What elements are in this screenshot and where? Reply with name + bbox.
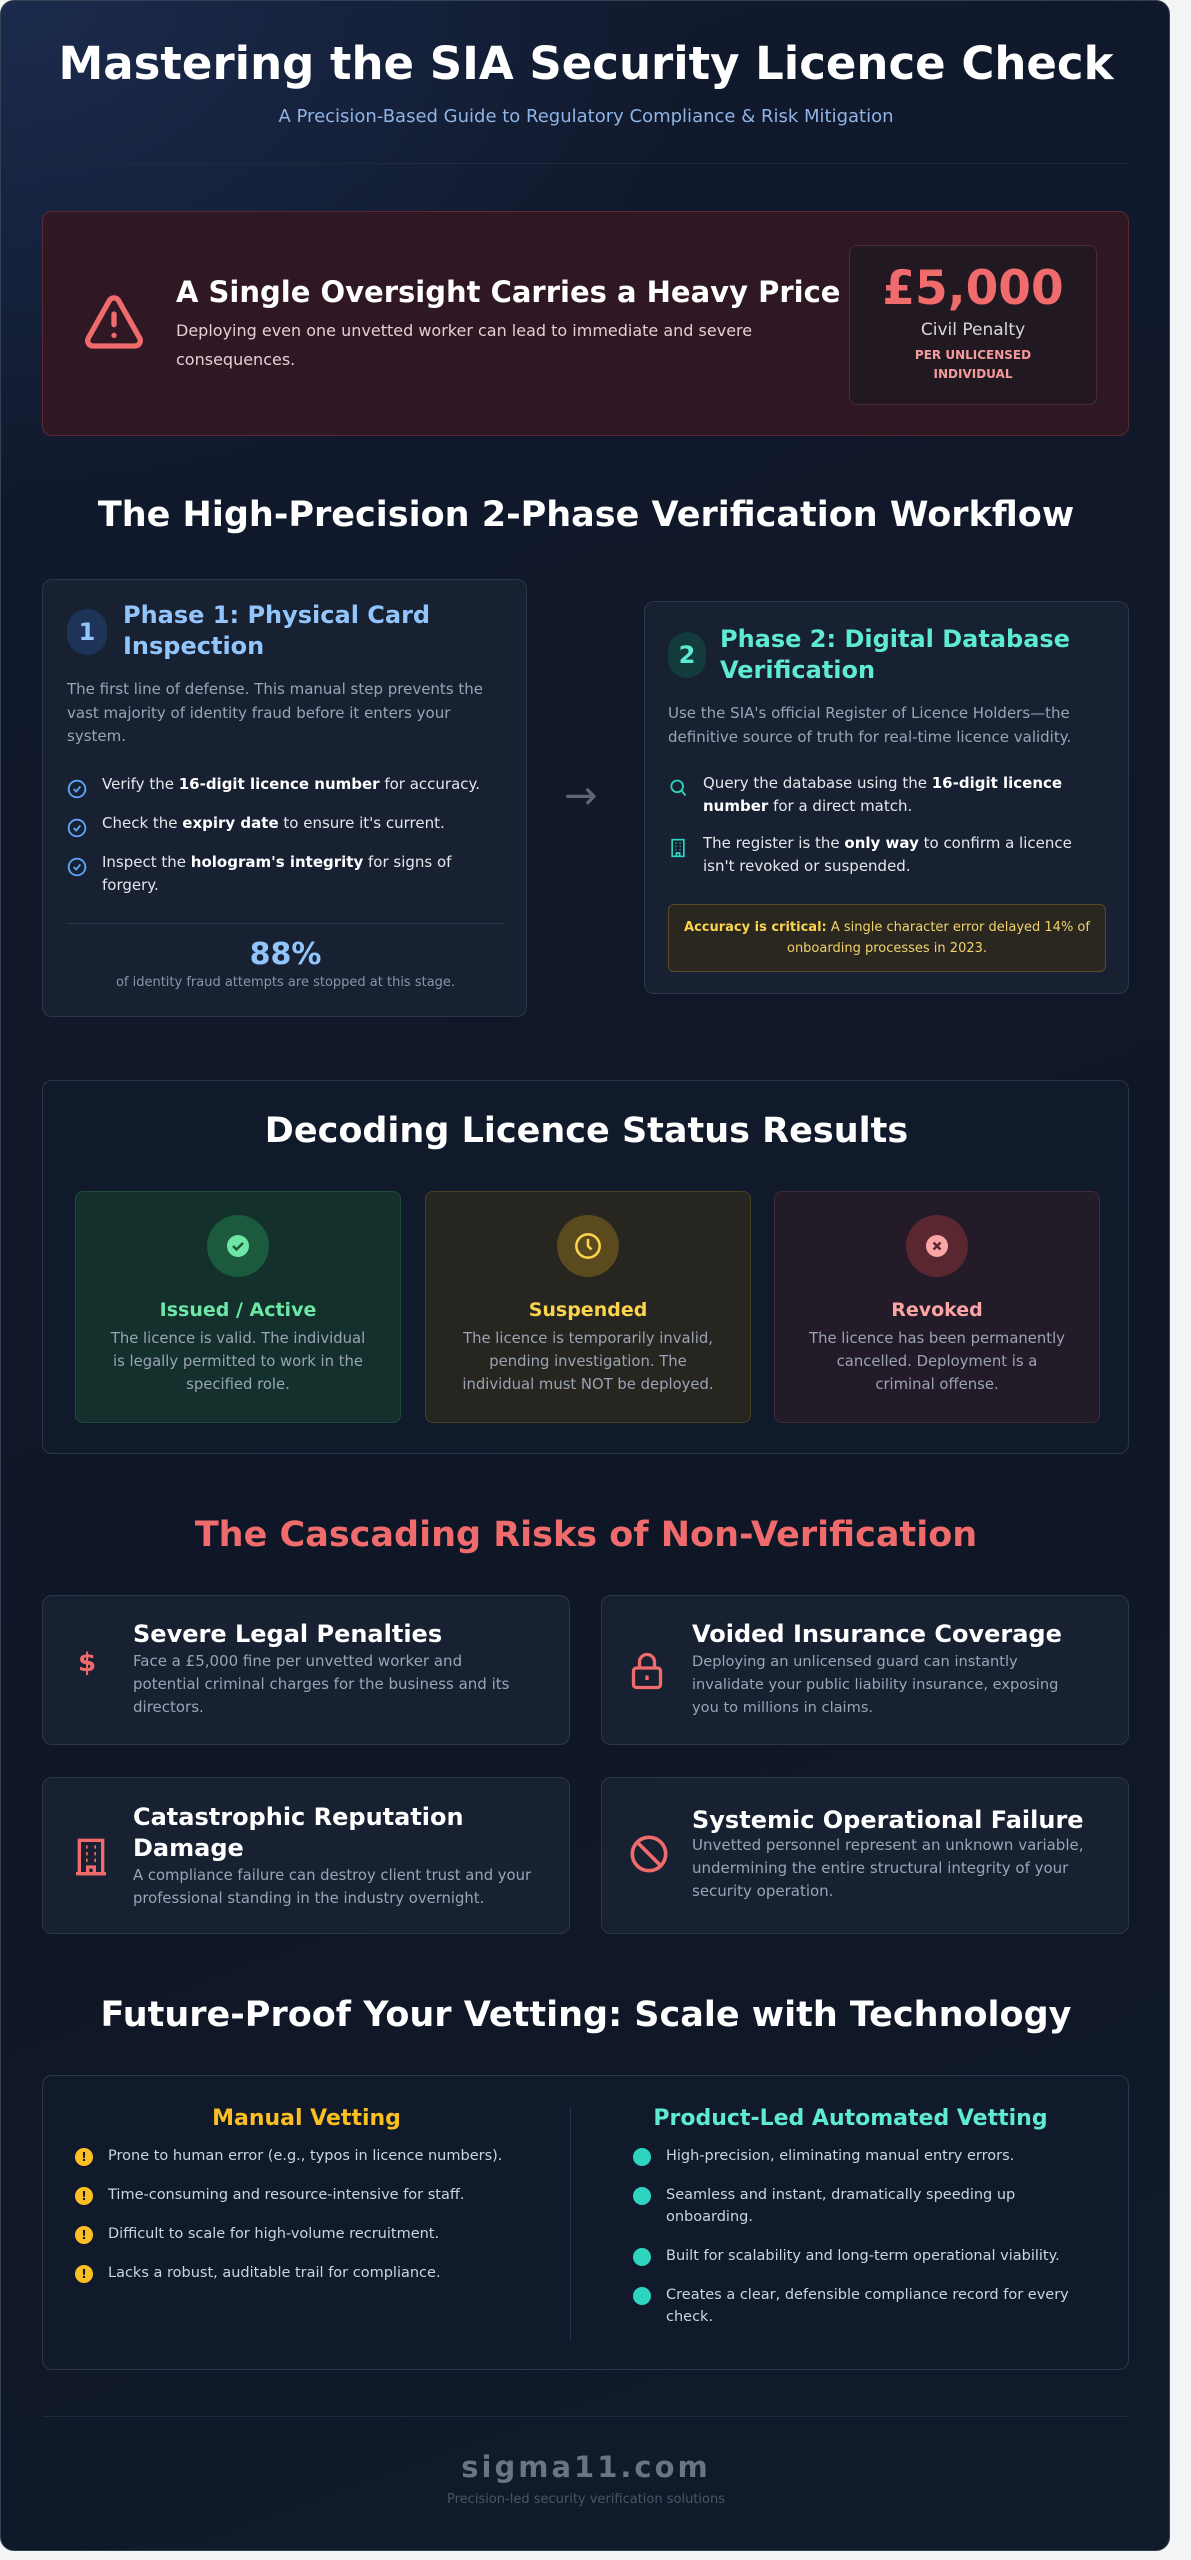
column: manual: ! xyxy=(81,2267,87,2281)
risk: legal xyxy=(42,1595,570,1745)
column: manual xyxy=(75,2106,502,2283)
status card: revoked: Revoked xyxy=(891,1299,983,1321)
penalty box: Civil Penalty xyxy=(921,320,1025,340)
icon: dollar: $ xyxy=(78,1648,96,1678)
column: automated: Creates a clear, defensible compliance record for every check. xyxy=(666,2287,1069,2325)
status card: revoked xyxy=(774,1191,1100,1423)
column: automated: High-precision, eliminating manual entry errors. xyxy=(666,2148,1014,2164)
stat 88%: 88% xyxy=(250,937,321,972)
risk: operational xyxy=(601,1777,1129,1934)
status card: suspended: The licence is temporarily invalid, pending investigation. The individual must NOT be deployed. xyxy=(462,1330,714,1393)
column: manual: Time-consuming and resource-intensive for staff. xyxy=(108,2187,464,2203)
stat 88%: of identity fraud attempts are stopped at this stage. xyxy=(116,975,455,990)
arrow: → xyxy=(564,773,598,819)
risk: operational: Unvetted personnel represent an unknown variable, undermining the entire structural integrity of your security operation. xyxy=(692,1836,1084,1900)
alert text: Deploying even one unvetted worker can lead to immediate and severe consequences. xyxy=(176,321,752,369)
alert panel xyxy=(42,211,1129,436)
column: manual: Prone to human error (e.g., typos in licence numbers). xyxy=(108,2148,502,2164)
penalty box: INDIVIDUAL xyxy=(934,367,1012,381)
status card: suspended: Suspended xyxy=(529,1299,647,1321)
risk: operational: Systemic Operational Failure xyxy=(692,1806,1084,1834)
section heading: technology: Future-Proof Your Vetting: Scale with Technology xyxy=(101,1995,1071,2035)
panel: comparison xyxy=(42,2075,1129,2370)
title: Mastering the SIA Security Licence Check xyxy=(58,37,1114,90)
risk: insurance: you to millions in claims. xyxy=(692,1699,873,1716)
column: manual: ! xyxy=(81,2150,87,2164)
penalty box xyxy=(849,245,1097,405)
icon: lock xyxy=(632,1652,662,1690)
status heading: Decoding Licence Status Results xyxy=(265,1111,908,1151)
phase 2 description: Use the SIA's official Register of Licence Holders—the definitive source of truth for real-time licence validity. xyxy=(668,704,1071,746)
penalty box: £5,000 xyxy=(882,261,1064,316)
panel: phase 2 xyxy=(644,601,1129,994)
checklist: Check the expiry date to ensure it's current. xyxy=(102,814,445,832)
column: automated: Seamless and instant, dramatically speeding up onboarding. xyxy=(666,2187,1015,2225)
phase 2 list: The register is the only way to confirm a licence isn't revoked or suspended. xyxy=(703,834,1072,875)
phase 2 heading: Phase 2: Digital Database Verification xyxy=(720,625,1070,684)
risk: insurance: Deploying an unlicensed guard can instantly xyxy=(692,1653,1018,1670)
callout: accuracy xyxy=(668,904,1106,972)
risk: insurance xyxy=(601,1595,1129,1745)
column: manual: Manual Vetting xyxy=(212,2106,401,2131)
risk: insurance: Voided Insurance Coverage xyxy=(692,1620,1062,1648)
footer brand: sigma11.com xyxy=(461,2450,711,2484)
badge 2: 2 xyxy=(679,641,695,669)
phase 1 description: The first line of defense. This manual step prevents the vast majority of identity fraud before it enters your system. xyxy=(67,680,483,745)
penalty box: PER UNLICENSED xyxy=(915,348,1031,362)
badge 2 xyxy=(668,632,706,678)
panel: licence status xyxy=(42,1080,1129,1454)
phase 2 list: Query the database using the 16-digit licence number for a direct match. xyxy=(703,774,1062,815)
footer tagline: Precision-led security verification solutions xyxy=(447,2492,725,2507)
risk: reputation xyxy=(42,1777,570,1934)
checklist: Verify the 16-digit licence number for accuracy. xyxy=(102,775,480,793)
stat 88% xyxy=(116,937,455,990)
risk: reputation: A compliance failure can destroy client trust and your professional standing in the industry overnight. xyxy=(133,1867,531,1907)
section heading: workflow: The High-Precision 2-Phase Verification Workflow xyxy=(98,495,1074,535)
column: automated: Product-Led Automated Vetting xyxy=(653,2106,1048,2131)
checklist: Inspect the hologram's integrity for signs of forgery. xyxy=(102,853,451,894)
column: manual: Lacks a robust, auditable trail for compliance. xyxy=(108,2265,441,2281)
badge 1 xyxy=(67,609,107,655)
section heading: risks: The Cascading Risks of Non-Verification xyxy=(195,1515,977,1555)
phase 1 heading: Phase 1: Physical Card Inspection xyxy=(123,601,430,660)
icon: warning triangle xyxy=(84,295,144,349)
column: automated xyxy=(633,2106,1069,2325)
icon: ban xyxy=(630,1836,668,1872)
column: automated: Built for scalability and long-term operational viability. xyxy=(666,2248,1060,2264)
risk: insurance: invalidate your public liability insurance, exposing xyxy=(692,1676,1058,1693)
risk: legal: Severe Legal Penalties xyxy=(133,1620,442,1648)
badge 1: 1 xyxy=(79,618,95,646)
status card: issued xyxy=(75,1191,401,1423)
alert heading: A Single Oversight Carries a Heavy Price xyxy=(176,275,840,309)
icon: building xyxy=(76,1838,106,1876)
checklist xyxy=(68,775,480,894)
subtitle: A Precision-Based Guide to Regulatory Compliance & Risk Mitigation xyxy=(278,106,894,127)
panel: phase 1 xyxy=(42,579,527,1017)
status card: revoked: criminal offense. xyxy=(875,1376,999,1393)
callout: accuracy: Accuracy is critical: A single character error delayed 14% of onboarding processes in 2023. xyxy=(684,920,1090,956)
status card: issued: The licence is valid. The individual is legally permitted to work in the specified role. xyxy=(111,1330,365,1393)
column: manual: Difficult to scale for high-volume recruitment. xyxy=(108,2226,439,2242)
phase 2 list xyxy=(670,774,1072,875)
status card: revoked: The licence has been permanently xyxy=(809,1330,1065,1347)
risk: reputation: Catastrophic Reputation Damage xyxy=(133,1803,464,1862)
status card: suspended xyxy=(425,1191,751,1423)
status card: issued: Issued / Active xyxy=(160,1299,316,1321)
column: manual: ! xyxy=(81,2228,87,2242)
risk: legal: Face a £5,000 fine per unvetted worker and potential criminal charges for the business and its directors. xyxy=(133,1652,509,1716)
status card: revoked: cancelled. Deployment is a xyxy=(837,1353,1037,1370)
column: manual: ! xyxy=(81,2189,87,2203)
